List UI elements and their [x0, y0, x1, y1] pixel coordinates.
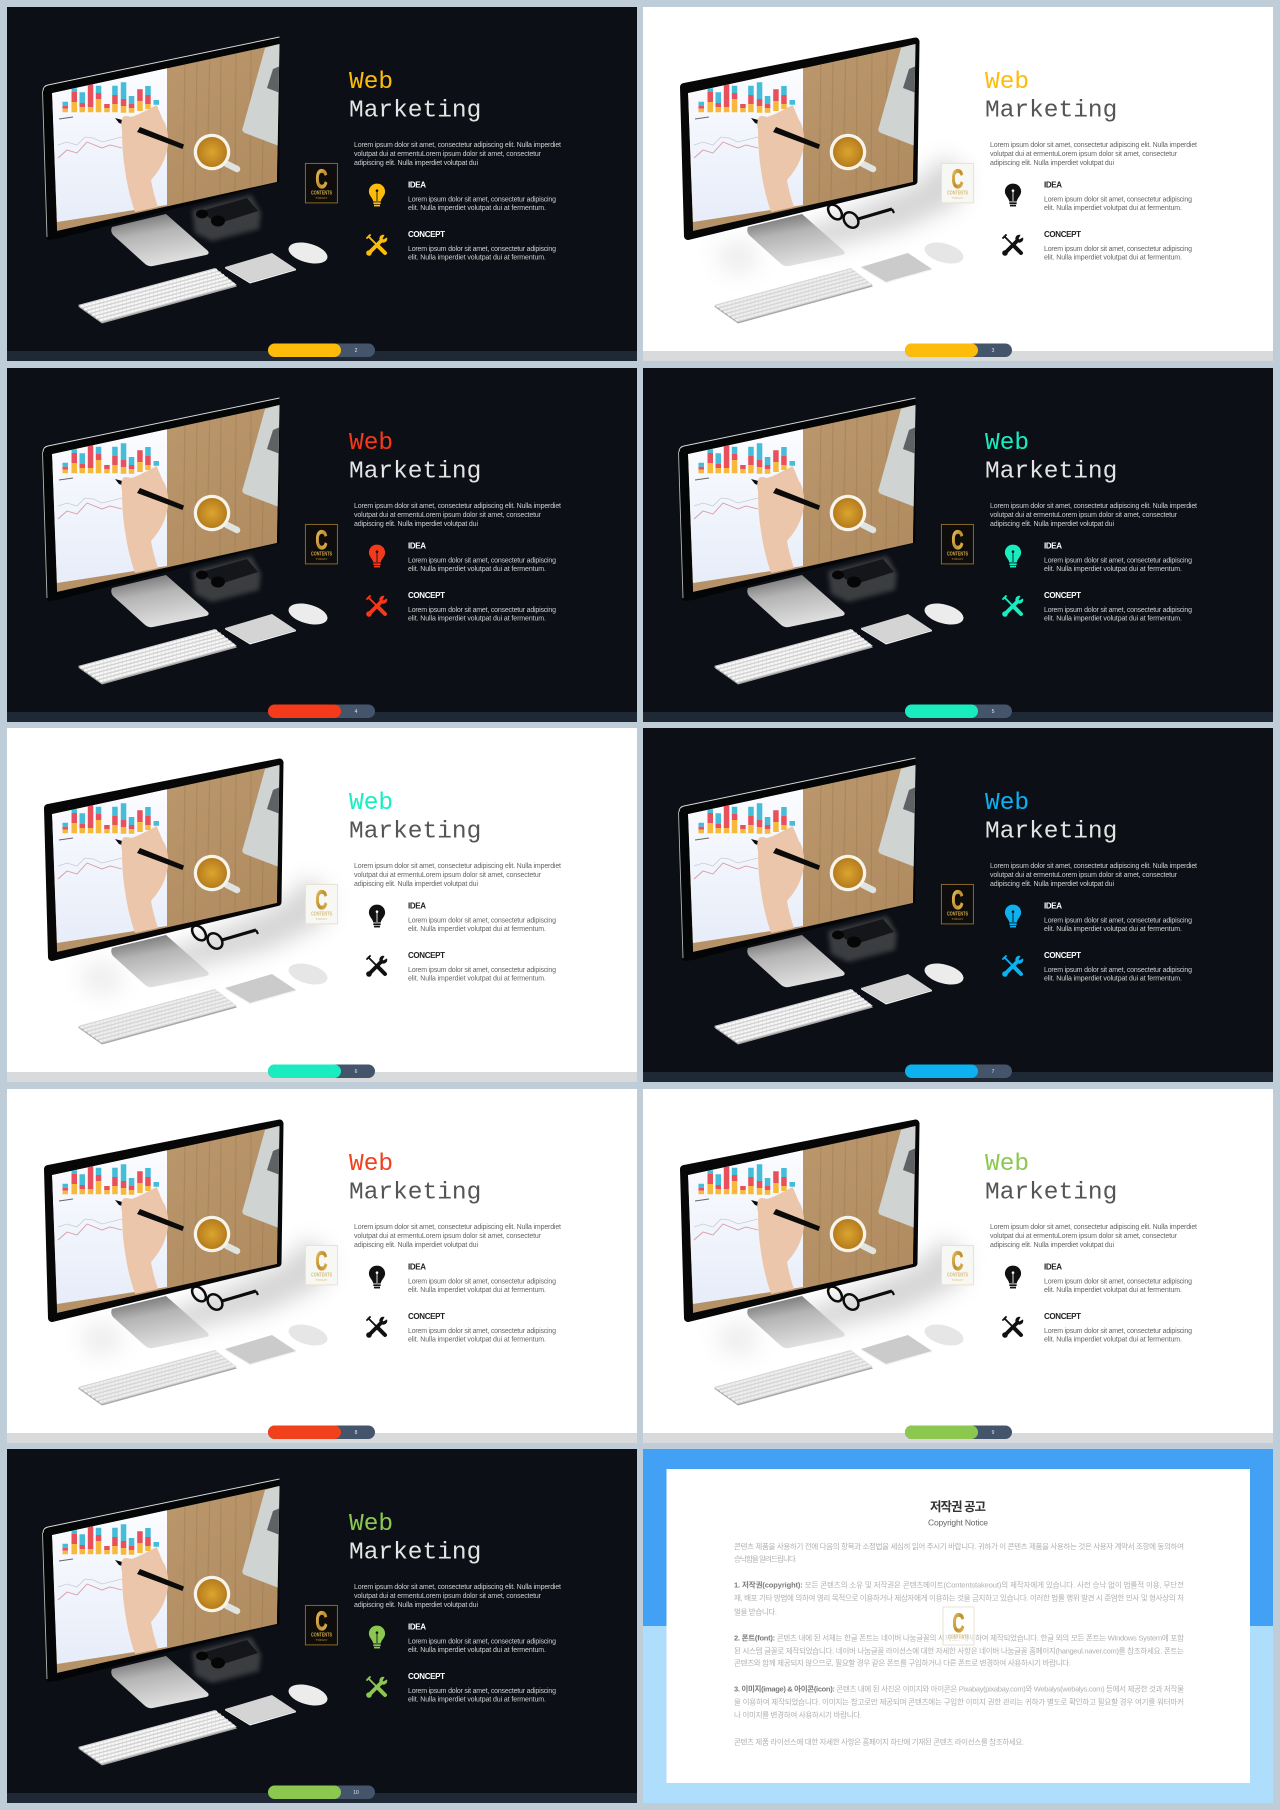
logo badge: C — [952, 524, 964, 554]
intro text — [354, 1584, 561, 1609]
text: concept — [408, 230, 556, 262]
section: copyright: 재, 배포 기타 방법에 의하여 영리 목적으로 이용하거나 제삼자에게 이용하는 것을 금지하고 있습니다. 이러한 법률 행위 발견 시 준엄한 민사 및 형사상의 처 — [734, 1592, 1184, 1602]
logo badge: TODAY — [316, 196, 328, 200]
text: idea: Lorem ipsum dolor sit amet, consectetur adipiscing — [408, 196, 556, 204]
logo badge: TODAY — [316, 556, 328, 560]
text: idea: elit. Nulla imperdiet volutpat dui at fermentum. — [408, 926, 546, 933]
icon: tools — [1002, 594, 1024, 616]
text: concept: Lorem ipsum dolor sit amet, consectetur adipiscing — [1044, 967, 1192, 974]
text: idea: IDEA — [1044, 902, 1062, 911]
text: idea — [408, 1262, 556, 1294]
logo badge: CONTENTS — [311, 1632, 332, 1638]
logo badge: C — [316, 885, 328, 915]
title: Web — [985, 430, 1029, 456]
icon: light bulb — [1005, 905, 1021, 927]
intro text: Lorem ipsum dolor sit amet, consectetur adipiscing elit. Nulla imperdiet — [990, 142, 1197, 149]
intro text: Lorem ipsum dolor sit amet, consectetur adipiscing elit. Nulla imperdiet — [354, 863, 561, 870]
logo badge: CONTENTS — [947, 551, 968, 557]
text: idea — [1044, 902, 1192, 933]
intro text — [354, 142, 561, 167]
intro text: adipiscing elit. Nulla imperdiet volutpat dui — [354, 160, 478, 167]
title — [349, 69, 481, 125]
text: idea: IDEA — [1044, 181, 1062, 190]
title — [349, 790, 481, 846]
illustration: computer desk — [48, 762, 330, 1044]
section: image and icon: 나 이미지를 변경하여 사용하시기 바랍니다. — [734, 1710, 862, 1720]
text: concept — [408, 1672, 556, 1704]
title: Web — [985, 69, 1029, 96]
panel: copyright notice — [643, 1449, 1273, 1803]
icon: light bulb — [369, 1626, 385, 1648]
title: Marketing — [985, 819, 1117, 846]
title — [349, 1150, 481, 1206]
illustration: computer desk — [42, 36, 330, 324]
footer bar and page pill: 5 — [992, 708, 995, 714]
text: concept: elit. Nulla imperdiet volutpat dui at fermentum. — [408, 254, 546, 262]
text: idea: elit. Nulla imperdiet volutpat dui at fermentum. — [1044, 926, 1182, 933]
intro text: volutpat dui at ermentuLorem ipsum dolor sit amet, consectetur — [354, 1232, 542, 1240]
intro paragraph: 콘텐츠 제품을 사용하기 전에 다음의 항목과 소정법을 세심히 읽어 주시기 바랍니다. 귀하가 이 콘텐츠 제품을 사용하는 것은 사용자 계약서 조항에 동의하여 — [734, 1541, 1184, 1551]
title: Web — [349, 790, 393, 817]
heading: 저작권 공고 — [930, 1499, 986, 1514]
intro text: adipiscing elit. Nulla imperdiet volutpat dui — [990, 1242, 1114, 1248]
section: font: 된 시스템 글꼴로 제작되었습니다. 네이버 나눔글꼴 라이선스에 대한 자세한 사항은 네이버 나눔글꼴 홈페이지(hangeul.naver.com)를 참조하세요. 폰트는 — [734, 1646, 1184, 1656]
logo badge — [305, 1245, 337, 1284]
title — [349, 1511, 481, 1567]
logo badge: CONTENTS — [947, 1272, 968, 1278]
logo badge: C — [952, 1608, 964, 1638]
icon: tools — [366, 1676, 388, 1698]
footer bar and page pill — [7, 344, 637, 361]
logo badge: C — [316, 1246, 328, 1276]
heading: Copyright Notice — [928, 1518, 988, 1528]
intro text — [990, 1224, 1197, 1248]
intro text: volutpat dui at ermentuLorem ipsum dolor sit amet, consectetur — [354, 1593, 542, 1600]
closing line: 콘텐츠 제품 라이선스에 대한 자세한 사항은 홈페이지 하단에 기재된 콘텐츠 라이선스를 참조하세요. — [734, 1736, 1024, 1746]
text: concept: Lorem ipsum dolor sit amet, consectetur adipiscing — [408, 1328, 556, 1334]
logo badge: TODAY — [952, 196, 964, 200]
text: idea: elit. Nulla imperdiet volutpat dui at fermentum. — [408, 566, 546, 572]
footer bar and page pill: 8 — [355, 1430, 358, 1436]
intro text: adipiscing elit. Nulla imperdiet volutpat dui — [990, 881, 1114, 888]
illustration: computer desk — [678, 397, 966, 684]
logo badge: C — [316, 1606, 328, 1636]
text: concept — [408, 951, 556, 982]
intro text: volutpat dui at ermentuLorem ipsum dolor sit amet, consectetur — [354, 151, 542, 158]
footer bar and page pill — [7, 1064, 637, 1082]
icon: tools — [1002, 234, 1024, 256]
text: concept — [1044, 951, 1192, 982]
footer bar and page pill — [643, 704, 1273, 722]
icon: tools — [1002, 1316, 1024, 1337]
logo badge: CONTENTS — [311, 1272, 332, 1278]
text: idea: IDEA — [408, 541, 426, 550]
intro text: Lorem ipsum dolor sit amet, consectetur adipiscing elit. Nulla imperdiet — [354, 1224, 561, 1230]
intro text: adipiscing elit. Nulla imperdiet volutpat dui — [354, 1242, 478, 1248]
panel: slide 3 light yellow — [643, 7, 1273, 361]
intro text — [990, 142, 1197, 167]
icon: tools — [366, 234, 388, 256]
text: idea: elit. Nulla imperdiet volutpat dui at fermentum. — [408, 1647, 546, 1654]
text: idea: Lorem ipsum dolor sit amet, consectetur adipiscing — [408, 1638, 556, 1646]
panel: slide 9 light green — [643, 1089, 1273, 1443]
text: idea: Lorem ipsum dolor sit amet, consectetur adipiscing — [1044, 1278, 1192, 1285]
footer bar and page pill — [643, 1425, 1273, 1442]
logo badge: TODAY — [952, 917, 964, 921]
title — [985, 430, 1117, 485]
title: Web — [349, 1150, 393, 1178]
intro text: volutpat dui at ermentuLorem ipsum dolor sit amet, consectetur — [990, 872, 1178, 879]
text: concept: CONCEPT — [408, 1672, 445, 1681]
text: concept: Lorem ipsum dolor sit amet, consectetur adipiscing — [1044, 606, 1192, 614]
intro paragraph: 승낙함을 알려드립니다. — [734, 1554, 797, 1564]
text: idea: elit. Nulla imperdiet volutpat dui at fermentum. — [408, 1286, 546, 1294]
title: Marketing — [349, 1540, 481, 1567]
logo badge: TODAY — [316, 1638, 328, 1642]
logo badge — [941, 1245, 973, 1284]
icon: tools — [366, 955, 388, 977]
text: concept: Lorem ipsum dolor sit amet, consectetur adipiscing — [408, 246, 556, 253]
section: font — [734, 1632, 1184, 1668]
text: concept: elit. Nulla imperdiet volutpat dui at fermentum. — [408, 976, 546, 982]
illustration: computer desk — [42, 397, 330, 684]
logo badge: CONTENTS — [947, 912, 968, 918]
title: Marketing — [985, 458, 1117, 485]
text: idea — [1044, 541, 1192, 572]
text: concept: elit. Nulla imperdiet volutpat dui at fermentum. — [1044, 976, 1182, 982]
intro text — [354, 1224, 561, 1248]
text: idea: Lorem ipsum dolor sit amet, consectetur adipiscing — [408, 1278, 556, 1285]
text: concept — [408, 590, 556, 622]
title — [349, 430, 481, 485]
text: idea: IDEA — [1044, 541, 1062, 550]
logo badge: C — [952, 1246, 964, 1276]
logo badge — [941, 163, 973, 203]
icon: light bulb — [1005, 184, 1021, 206]
icon: light bulb — [1005, 1265, 1021, 1288]
text: idea: elit. Nulla imperdiet volutpat dui at fermentum. — [1044, 566, 1182, 572]
text: idea — [408, 541, 556, 572]
panel: slide 5 dark teal — [643, 368, 1273, 722]
intro text: Lorem ipsum dolor sit amet, consectetur adipiscing elit. Nulla imperdiet — [990, 502, 1197, 510]
text: idea: Lorem ipsum dolor sit amet, consectetur adipiscing — [408, 918, 556, 924]
logo badge: C — [316, 524, 328, 554]
title — [985, 1150, 1117, 1206]
text: concept: CONCEPT — [408, 951, 445, 960]
logo badge: C — [952, 164, 964, 194]
text: idea — [1044, 181, 1192, 212]
title — [985, 790, 1117, 846]
text: idea — [1044, 1262, 1192, 1294]
intro text: adipiscing elit. Nulla imperdiet volutpat dui — [990, 160, 1114, 167]
text: concept: CONCEPT — [408, 590, 445, 600]
text: concept: elit. Nulla imperdiet volutpat dui at fermentum. — [408, 615, 546, 622]
logo badge: TODAY — [316, 917, 328, 921]
text: concept: elit. Nulla imperdiet volutpat dui at fermentum. — [408, 1336, 546, 1343]
title: Marketing — [349, 458, 481, 485]
logo badge — [305, 1605, 337, 1645]
notice card — [666, 1469, 1250, 1783]
logo badge — [305, 163, 337, 203]
intro text: adipiscing elit. Nulla imperdiet volutpat dui — [354, 1602, 478, 1609]
text: concept: CONCEPT — [1044, 230, 1081, 239]
text: concept: CONCEPT — [1044, 951, 1081, 960]
title: Marketing — [349, 819, 481, 846]
title: Web — [985, 1150, 1029, 1178]
title: Web — [349, 430, 393, 456]
intro text: volutpat dui at ermentuLorem ipsum dolor sit amet, consectetur — [990, 151, 1178, 158]
section: copyright: 1. 저작권(copyright): 모든 콘텐츠의 소유 및 저작권은 콘텐츠메이트(Contentstakeout)의 제작자에게 있습니다. 사전 승낙 없이 법률적 이용, 무단전 — [734, 1580, 1184, 1590]
intro text: adipiscing elit. Nulla imperdiet volutpat dui — [354, 520, 478, 528]
intro text: Lorem ipsum dolor sit amet, consectetur adipiscing elit. Nulla imperdiet — [354, 502, 561, 510]
text: idea: Lorem ipsum dolor sit amet, consectetur adipiscing — [1044, 196, 1192, 204]
text: concept: CONCEPT — [408, 1312, 445, 1320]
logo badge: TODAY — [952, 1278, 964, 1282]
footer bar and page pill — [7, 1425, 637, 1442]
icon: light bulb — [369, 1265, 385, 1288]
text: idea — [408, 181, 556, 212]
icon: light bulb — [369, 544, 385, 567]
intro text — [990, 863, 1197, 888]
text: concept: Lorem ipsum dolor sit amet, consectetur adipiscing — [1044, 246, 1192, 253]
text: idea: IDEA — [408, 181, 426, 190]
text: idea: elit. Nulla imperdiet volutpat dui at fermentum. — [408, 205, 546, 212]
title: Web — [349, 1511, 393, 1538]
logo badge: CONTENTS — [311, 912, 332, 918]
footer bar and page pill: 7 — [992, 1069, 995, 1075]
panel: slide 4 dark red — [7, 368, 637, 722]
logo badge: TODAY — [952, 556, 964, 560]
section: copyright — [734, 1580, 1184, 1616]
logo badge: CONTENTS — [947, 190, 968, 196]
intro text: Lorem ipsum dolor sit amet, consectetur adipiscing elit. Nulla imperdiet — [990, 1224, 1197, 1230]
illustration: computer desk — [48, 1123, 330, 1405]
intro text — [990, 502, 1197, 528]
text: idea: IDEA — [408, 1262, 426, 1271]
intro text: volutpat dui at ermentuLorem ipsum dolor sit amet, consectetur — [990, 1232, 1178, 1240]
intro paragraph — [734, 1541, 1184, 1564]
illustration: computer desk — [684, 42, 966, 324]
section: image and icon — [734, 1684, 1184, 1720]
text: idea: Lorem ipsum dolor sit amet, consectetur adipiscing — [1044, 557, 1192, 564]
panel: slide 6 light teal — [7, 728, 637, 1082]
intro text: volutpat dui at ermentuLorem ipsum dolor sit amet, consectetur — [354, 872, 542, 879]
text: idea: IDEA — [1044, 1262, 1062, 1271]
intro text: volutpat dui at ermentuLorem ipsum dolor sit amet, consectetur — [990, 512, 1178, 518]
icon: tools — [366, 1316, 388, 1337]
title: Marketing — [985, 1179, 1117, 1206]
intro text: Lorem ipsum dolor sit amet, consectetur adipiscing elit. Nulla imperdiet — [990, 863, 1197, 870]
logo badge: TODAY — [316, 1278, 328, 1282]
text: concept — [1044, 1312, 1192, 1343]
logo badge: C — [316, 164, 328, 194]
footer bar and page pill: 2 — [355, 348, 358, 354]
intro text: adipiscing elit. Nulla imperdiet volutpat dui — [990, 520, 1114, 528]
logo badge: CONTENTS — [948, 1634, 969, 1640]
panel: slide 8 light red — [7, 1089, 637, 1443]
title — [985, 69, 1117, 125]
icon: tools — [1002, 955, 1024, 977]
footer bar and page pill — [7, 704, 637, 722]
intro text — [354, 502, 561, 528]
footer bar and page pill: 4 — [355, 708, 358, 714]
text: idea: IDEA — [408, 902, 426, 911]
text: concept: elit. Nulla imperdiet volutpat dui at fermentum. — [1044, 615, 1182, 622]
footer bar and page pill — [7, 1786, 637, 1803]
text: concept: Lorem ipsum dolor sit amet, consectetur adipiscing — [408, 967, 556, 974]
text: idea — [408, 902, 556, 933]
section: font: 콘텐츠와 함께 제공되지 않으므로, 필요할 경우 같은 폰트를 구입하거나 다른 폰트로 변경하여 사용하시기 바랍니다. — [734, 1658, 1071, 1668]
text: concept — [408, 1312, 556, 1343]
footer bar and page pill — [643, 1064, 1273, 1082]
title: Marketing — [985, 98, 1117, 125]
text: concept: CONCEPT — [1044, 1312, 1081, 1320]
footer bar and page pill: 9 — [992, 1430, 995, 1436]
text: concept: elit. Nulla imperdiet volutpat dui at fermentum. — [1044, 1336, 1182, 1343]
text: idea: Lorem ipsum dolor sit amet, consectetur adipiscing — [1044, 918, 1192, 924]
intro text: Lorem ipsum dolor sit amet, consectetur adipiscing elit. Nulla imperdiet — [354, 1584, 561, 1591]
intro text: adipiscing elit. Nulla imperdiet volutpat dui — [354, 881, 478, 888]
icon: light bulb — [369, 905, 385, 927]
text: concept: Lorem ipsum dolor sit amet, consectetur adipiscing — [408, 1688, 556, 1695]
section: copyright: 벌을 받습니다. — [734, 1606, 777, 1616]
intro text — [354, 863, 561, 888]
text: concept: CONCEPT — [1044, 590, 1081, 600]
text: concept: CONCEPT — [408, 230, 445, 239]
logo badge — [941, 884, 973, 924]
text: idea: elit. Nulla imperdiet volutpat dui at fermentum. — [1044, 205, 1182, 212]
footer bar and page pill: 10 — [353, 1790, 359, 1796]
logo badge — [943, 1607, 974, 1645]
text: concept: elit. Nulla imperdiet volutpat dui at fermentum. — [1044, 254, 1182, 262]
illustration: computer desk — [678, 758, 966, 1044]
title: Web — [349, 69, 393, 96]
text: concept — [1044, 590, 1192, 622]
logo badge: CONTENTS — [311, 190, 332, 196]
text: idea: elit. Nulla imperdiet volutpat dui at fermentum. — [1044, 1286, 1182, 1294]
text: concept — [1044, 230, 1192, 262]
text: concept: elit. Nulla imperdiet volutpat dui at fermentum. — [408, 1696, 546, 1704]
text: idea: IDEA — [408, 1623, 426, 1632]
panel: slide 10 dark green — [7, 1449, 637, 1803]
footer bar and page pill: 3 — [992, 348, 995, 354]
icon: light bulb — [1005, 544, 1021, 567]
icon: light bulb — [369, 184, 385, 206]
intro text: Lorem ipsum dolor sit amet, consectetur adipiscing elit. Nulla imperdiet — [354, 142, 561, 149]
section: image and icon: 3. 이미지(image) & 아이콘(icon): 콘텐츠 내에 된 사진은 이미지와 아이콘은 Pixabay(pixabay.com)와 Webalys(webalys.com) 등에서 제공한 것과 저작물 — [734, 1684, 1184, 1694]
text: concept: Lorem ipsum dolor sit amet, consectetur adipiscing — [1044, 1328, 1192, 1334]
illustration: computer desk — [684, 1123, 966, 1405]
heading — [928, 1499, 988, 1528]
footer bar and page pill: 6 — [355, 1069, 358, 1075]
intro text: volutpat dui at ermentuLorem ipsum dolor sit amet, consectetur — [354, 512, 542, 518]
illustration: computer desk — [42, 1478, 330, 1766]
text: concept: Lorem ipsum dolor sit amet, consectetur adipiscing — [408, 606, 556, 614]
title: Marketing — [349, 1179, 481, 1206]
section: font: 2. 폰트(font): 콘텐츠 내에 된 서체는 한글 폰트는 네이버 나눔글꼴의 서체로, 대체하여 제작되었습니다. 한글 외의 모든 폰트는 Windows System에 포함 — [734, 1632, 1184, 1642]
logo badge — [305, 524, 337, 563]
icon: tools — [366, 594, 388, 616]
text: idea: Lorem ipsum dolor sit amet, consectetur adipiscing — [408, 557, 556, 564]
title: Marketing — [349, 98, 481, 125]
logo badge: CONTENTS — [311, 551, 332, 557]
title: Web — [985, 790, 1029, 817]
panel: slide 2 dark yellow — [7, 7, 637, 361]
text: idea — [408, 1623, 556, 1654]
logo badge — [941, 524, 973, 563]
footer bar and page pill — [643, 344, 1273, 361]
section: image and icon: 을 이용하여 제작되었습니다. 이미지는 참고로만 제공되며 콘텐츠에는 구입한 이미지 권한 관리는 귀하가 별도로 확인하고 필요할 경우 여기를 워터마커 — [734, 1696, 1184, 1706]
panel: slide 7 dark blue — [643, 728, 1273, 1082]
logo badge — [305, 884, 337, 924]
logo badge: C — [952, 885, 964, 915]
